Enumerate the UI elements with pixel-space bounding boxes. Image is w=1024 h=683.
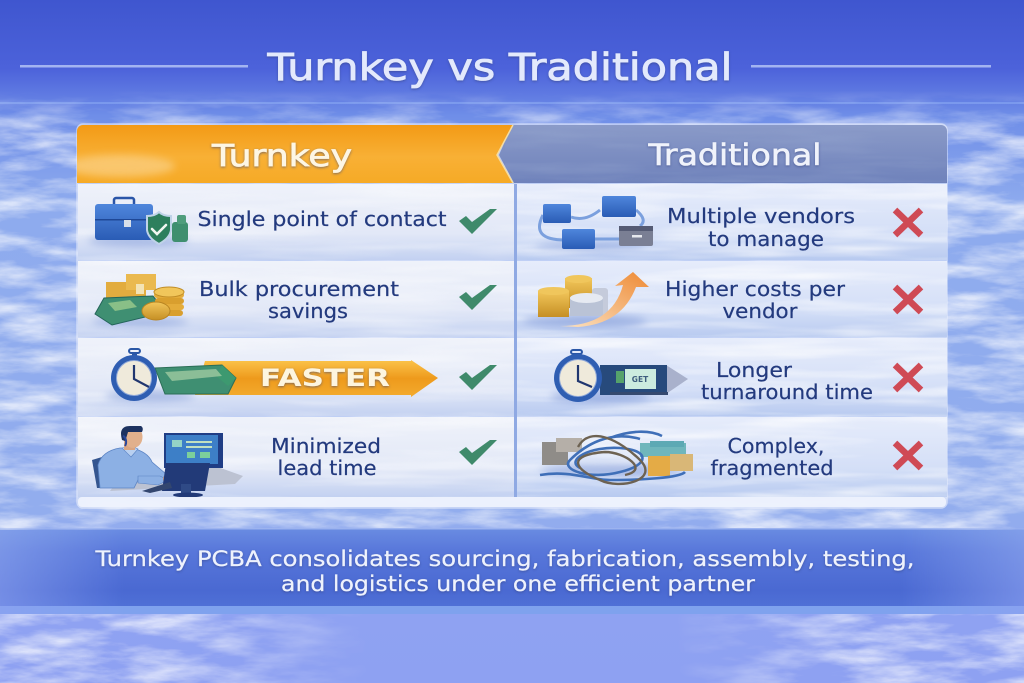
row 1: single point of contact: Single point of contact xyxy=(198,207,447,231)
footer banner: and logistics under one efficient partner xyxy=(281,572,755,596)
footer banner: Turnkey PCBA consolidates sourcing, fabrication, assembly, testing, xyxy=(94,547,914,571)
text: minimized lead time: lead time xyxy=(278,456,376,480)
icon: check mark xyxy=(459,440,497,465)
text: complex fragmented: fragmented xyxy=(710,456,834,480)
icon: red cross xyxy=(895,365,921,390)
icon: tangled cables and boxes xyxy=(540,432,693,484)
row 3: longer turnaround xyxy=(517,338,947,416)
footer banner xyxy=(0,528,1024,614)
icon: boxes, card and coins xyxy=(92,274,188,327)
text: multiple vendors to manage: to manage xyxy=(708,227,824,251)
icon: stopwatch and tablet xyxy=(550,350,688,403)
icon: stopwatch and banknotes xyxy=(105,349,236,401)
icon: check mark xyxy=(459,365,497,390)
text: multiple vendors to manage xyxy=(667,204,855,251)
icon: red cross xyxy=(895,210,921,235)
icon: check mark xyxy=(459,209,497,234)
text: minimized lead time xyxy=(271,434,381,480)
text: minimized lead time: Minimized xyxy=(271,434,381,458)
text: complex fragmented xyxy=(710,434,834,480)
row 1: single point of contact xyxy=(78,184,514,260)
text: bulk procurement savings xyxy=(199,277,399,323)
header: Turnkey: Turnkey xyxy=(211,139,352,174)
text: bulk procurement savings: savings xyxy=(268,299,348,323)
text: multiple vendors to manage: Multiple vendors xyxy=(667,204,855,228)
text: higher costs per vendor: Higher costs per xyxy=(665,277,846,301)
row 4: minimized lead time xyxy=(78,417,514,498)
row 2: bulk procurement savings xyxy=(78,261,514,337)
text: longer turnaround time: Longer xyxy=(716,358,793,382)
column: Traditional rows xyxy=(514,184,947,497)
header: Traditional: Traditional xyxy=(647,138,822,172)
icon: stopwatch and tablet: GET xyxy=(632,375,649,384)
icon: linked vendor boxes xyxy=(535,196,653,251)
text: longer turnaround time: turnaround time xyxy=(701,380,873,404)
column: Turnkey rows xyxy=(78,184,514,498)
title with side rules: Turnkey vs Traditional xyxy=(266,46,732,89)
comparison panel xyxy=(65,124,947,508)
row 2: higher costs xyxy=(517,261,947,337)
header: Traditional xyxy=(499,125,947,183)
text: bulk procurement savings: Bulk procurement xyxy=(199,277,399,301)
icon: red cross xyxy=(895,443,921,468)
row 1: multiple vendors xyxy=(517,184,947,260)
text: higher costs per vendor xyxy=(665,277,846,323)
icon: red cross xyxy=(895,287,921,312)
row 4: complex fragmented xyxy=(517,417,947,497)
icon: briefcase and shield xyxy=(88,198,188,247)
text: longer turnaround time xyxy=(701,358,873,404)
text: complex fragmented: Complex, xyxy=(728,434,824,458)
header: Turnkey xyxy=(65,125,513,183)
text: higher costs per vendor: vendor xyxy=(722,299,798,323)
icon: coins and rising arrow xyxy=(523,272,649,327)
arrow: faster xyxy=(195,360,438,397)
arrow: faster: FASTER xyxy=(260,364,390,392)
icon: check mark xyxy=(459,285,497,310)
icon: person at computer xyxy=(92,426,243,498)
row 3: faster xyxy=(78,338,514,416)
